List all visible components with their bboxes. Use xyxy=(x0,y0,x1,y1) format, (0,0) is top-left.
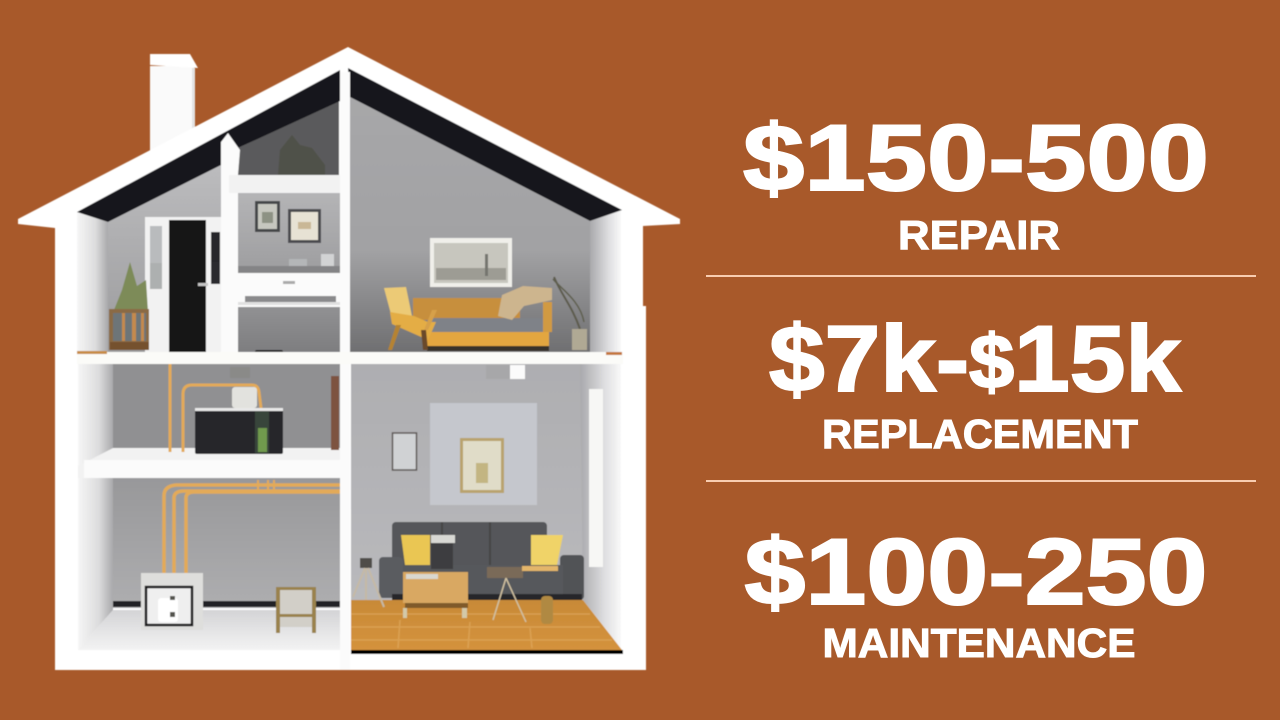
icon: furnace box xyxy=(141,573,203,630)
icon: copper pipes lower xyxy=(164,480,340,573)
icon: landscape picture xyxy=(430,238,512,287)
shelf xyxy=(78,448,340,478)
replacement amount: 15k xyxy=(1014,306,1182,411)
wood floor plank streaks xyxy=(351,614,612,648)
icon: wall picture xyxy=(255,201,280,232)
repair cost xyxy=(743,105,1209,258)
icon: side table xyxy=(487,566,558,622)
replacement amount: $7k- xyxy=(769,306,957,411)
panel: attic xyxy=(236,101,339,175)
repair amount: $150-500 xyxy=(743,105,1209,210)
wall panel xyxy=(430,403,537,505)
shelf objects xyxy=(238,254,340,273)
black roof underside xyxy=(77,68,622,222)
replacement cost xyxy=(769,306,1182,457)
house shell and roof xyxy=(18,47,680,670)
replacement amount: $ xyxy=(969,320,1014,405)
icon: yellow cushion right xyxy=(531,535,563,565)
divider xyxy=(706,275,1256,277)
interior walls and floor slab xyxy=(77,72,623,670)
icon: yellow cushion left xyxy=(401,535,430,565)
icon: wall air conditioner xyxy=(237,273,340,307)
divider xyxy=(706,480,1256,482)
icon: grey sofa xyxy=(379,522,584,600)
replacement label: REPLACEMENT xyxy=(822,411,1138,457)
icon: small frame xyxy=(392,433,416,470)
icon: small easel stool xyxy=(276,587,316,633)
maintenance cost xyxy=(744,519,1208,666)
icon: vase with plant xyxy=(553,277,587,350)
icon: tall window xyxy=(589,389,603,567)
house cutaway illustration xyxy=(18,47,680,670)
chimney xyxy=(150,54,198,160)
panel: lower right living room xyxy=(351,364,623,654)
icon: potted plant xyxy=(109,262,149,350)
panel: lower left utility room xyxy=(78,364,340,650)
icon: copper pipes upper xyxy=(170,364,261,452)
icon: framed picture xyxy=(460,438,504,493)
icon: sofa bed xyxy=(413,286,552,351)
icon: small decorative figure xyxy=(541,596,553,624)
panel: upper right room xyxy=(350,97,621,352)
icon: indoor unit xyxy=(195,367,283,454)
maintenance amount: $100-250 xyxy=(744,519,1208,624)
maintenance label: MAINTENANCE xyxy=(822,620,1136,666)
icon: wall picture xyxy=(288,209,321,243)
icon: coffee table xyxy=(403,572,468,618)
icon: armchair xyxy=(384,287,437,350)
stacked books xyxy=(431,535,455,569)
panel: upper middle room xyxy=(237,193,340,355)
panel: upper left room xyxy=(77,163,221,352)
icon: tripod xyxy=(353,558,384,607)
icon: door xyxy=(145,217,221,352)
repair label: REPAIR xyxy=(898,212,1060,258)
panel: cost list xyxy=(706,105,1256,666)
